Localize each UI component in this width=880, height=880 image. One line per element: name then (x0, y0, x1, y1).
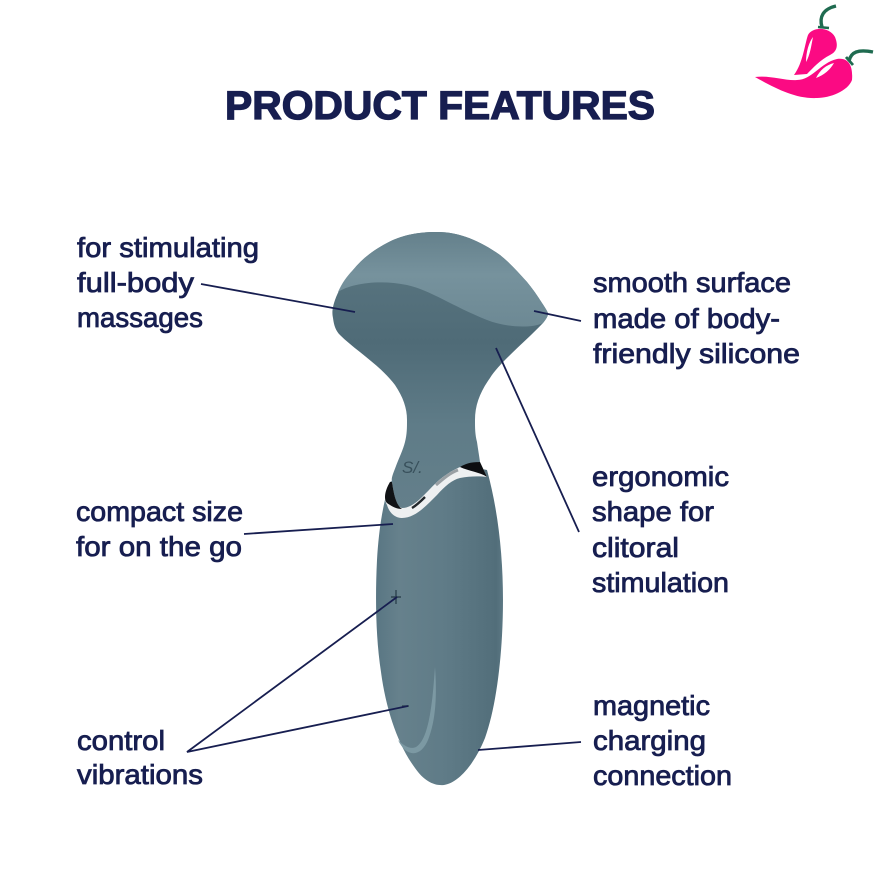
label: full-body massages: full-body (77, 267, 194, 298)
label: silicone surface: smooth surface (593, 267, 791, 298)
label: compact size (76, 496, 243, 562)
label: ergonomic shape: ergonomic (592, 461, 729, 492)
curved groove (398, 667, 436, 753)
minus button (402, 705, 409, 707)
silver band (385, 462, 487, 518)
label: silicone surface: friendly silicone (593, 338, 800, 369)
label: compact size: for on the go (76, 531, 242, 562)
label: silicone surface: made of body- (593, 303, 780, 334)
label: control vibrations: control (77, 725, 165, 756)
label: magnetic charging (593, 690, 732, 791)
label: ergonomic shape: shape for (592, 496, 714, 527)
label: magnetic charging: charging (593, 725, 706, 756)
label: ergonomic shape: clitoral (592, 532, 679, 563)
label: control vibrations: vibrations (77, 759, 203, 790)
label: full-body massages (77, 232, 259, 333)
wand body (376, 468, 503, 785)
label: magnetic charging: magnetic (593, 690, 710, 721)
plus button (391, 590, 401, 604)
label: compact size: compact size (76, 496, 243, 527)
label: ergonomic shape (592, 461, 729, 598)
label: full-body massages: massages (77, 302, 203, 333)
leader lines (187, 284, 581, 752)
title: PRODUCT FEATURES (225, 84, 655, 128)
label: control vibrations (77, 725, 203, 790)
label: magnetic charging: connection (593, 760, 732, 791)
label: silicone surface (593, 267, 800, 369)
wand neck and head (332, 232, 548, 509)
icon: chili logo (755, 6, 873, 98)
brand logo mark: S/. (402, 458, 423, 477)
label: full-body massages: for stimulating (77, 232, 259, 263)
head upper surface (338, 232, 548, 327)
label: ergonomic shape: stimulation (592, 567, 729, 598)
product: massage wand (332, 232, 548, 785)
